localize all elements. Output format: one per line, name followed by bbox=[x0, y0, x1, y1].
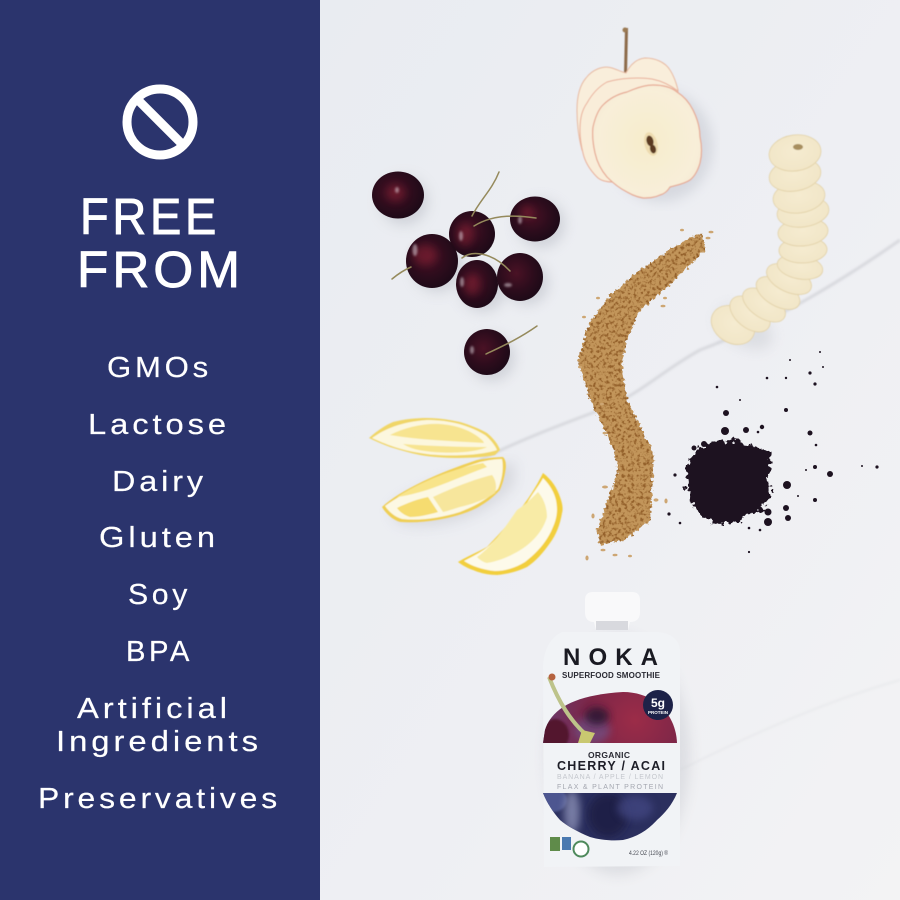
product pouch bbox=[539, 592, 690, 875]
protein badge bbox=[643, 690, 673, 720]
flavor label: BANANA / APPLE / LEMON bbox=[557, 774, 663, 781]
icon: prohibited sign bbox=[127, 89, 193, 155]
panel: free from bbox=[0, 0, 320, 900]
flavor label: ORGANIC bbox=[588, 750, 630, 760]
lemon wedge two bbox=[382, 457, 506, 522]
banana slices bbox=[704, 132, 831, 359]
list of excluded ingredients: Dairy bbox=[112, 466, 207, 498]
list of excluded ingredients: Soy bbox=[128, 579, 191, 611]
flavor label bbox=[557, 750, 665, 791]
apple slices bbox=[577, 28, 713, 202]
heading: free from: FREE bbox=[80, 188, 220, 245]
heading: free from bbox=[77, 188, 244, 298]
product descriptor: SUPERFOOD SMOOTHIE bbox=[562, 671, 661, 680]
heading: free from: FROM bbox=[77, 241, 244, 298]
brand logo: NOKA bbox=[563, 644, 658, 671]
certification logos bbox=[550, 837, 588, 856]
lemon wedges bbox=[369, 418, 563, 575]
list of excluded ingredients bbox=[38, 352, 281, 815]
lemon wedge three bbox=[458, 473, 563, 575]
acai powder bbox=[667, 351, 879, 553]
net weight: 4.22 OZ (120g) ® bbox=[629, 849, 668, 857]
list of excluded ingredients: Lactose bbox=[88, 409, 230, 441]
marble background bbox=[320, 0, 900, 900]
flavor label: FLAX & PLANT PROTEIN bbox=[557, 784, 663, 791]
flavor label: CHERRY / ACAI bbox=[557, 759, 665, 773]
cherry image on pouch bbox=[543, 674, 677, 743]
list of excluded ingredients: Ingredients bbox=[56, 726, 262, 758]
protein badge: PROTEIN bbox=[648, 710, 668, 715]
cherries bbox=[372, 172, 565, 381]
list of excluded ingredients: Preservatives bbox=[38, 783, 281, 815]
panel background bbox=[0, 0, 320, 900]
lemon wedge one bbox=[369, 418, 500, 458]
list of excluded ingredients: Gluten bbox=[99, 522, 219, 554]
acai image on pouch bbox=[543, 793, 677, 840]
flax seeds bbox=[578, 229, 714, 560]
protein badge: 5g bbox=[651, 696, 665, 710]
pouch cap bbox=[585, 592, 640, 630]
pouch body bbox=[543, 632, 680, 867]
list of excluded ingredients: BPA bbox=[126, 636, 193, 668]
marble veins bbox=[480, 240, 900, 770]
list of excluded ingredients: Artificial bbox=[77, 693, 231, 725]
list of excluded ingredients: GMOs bbox=[107, 352, 212, 384]
